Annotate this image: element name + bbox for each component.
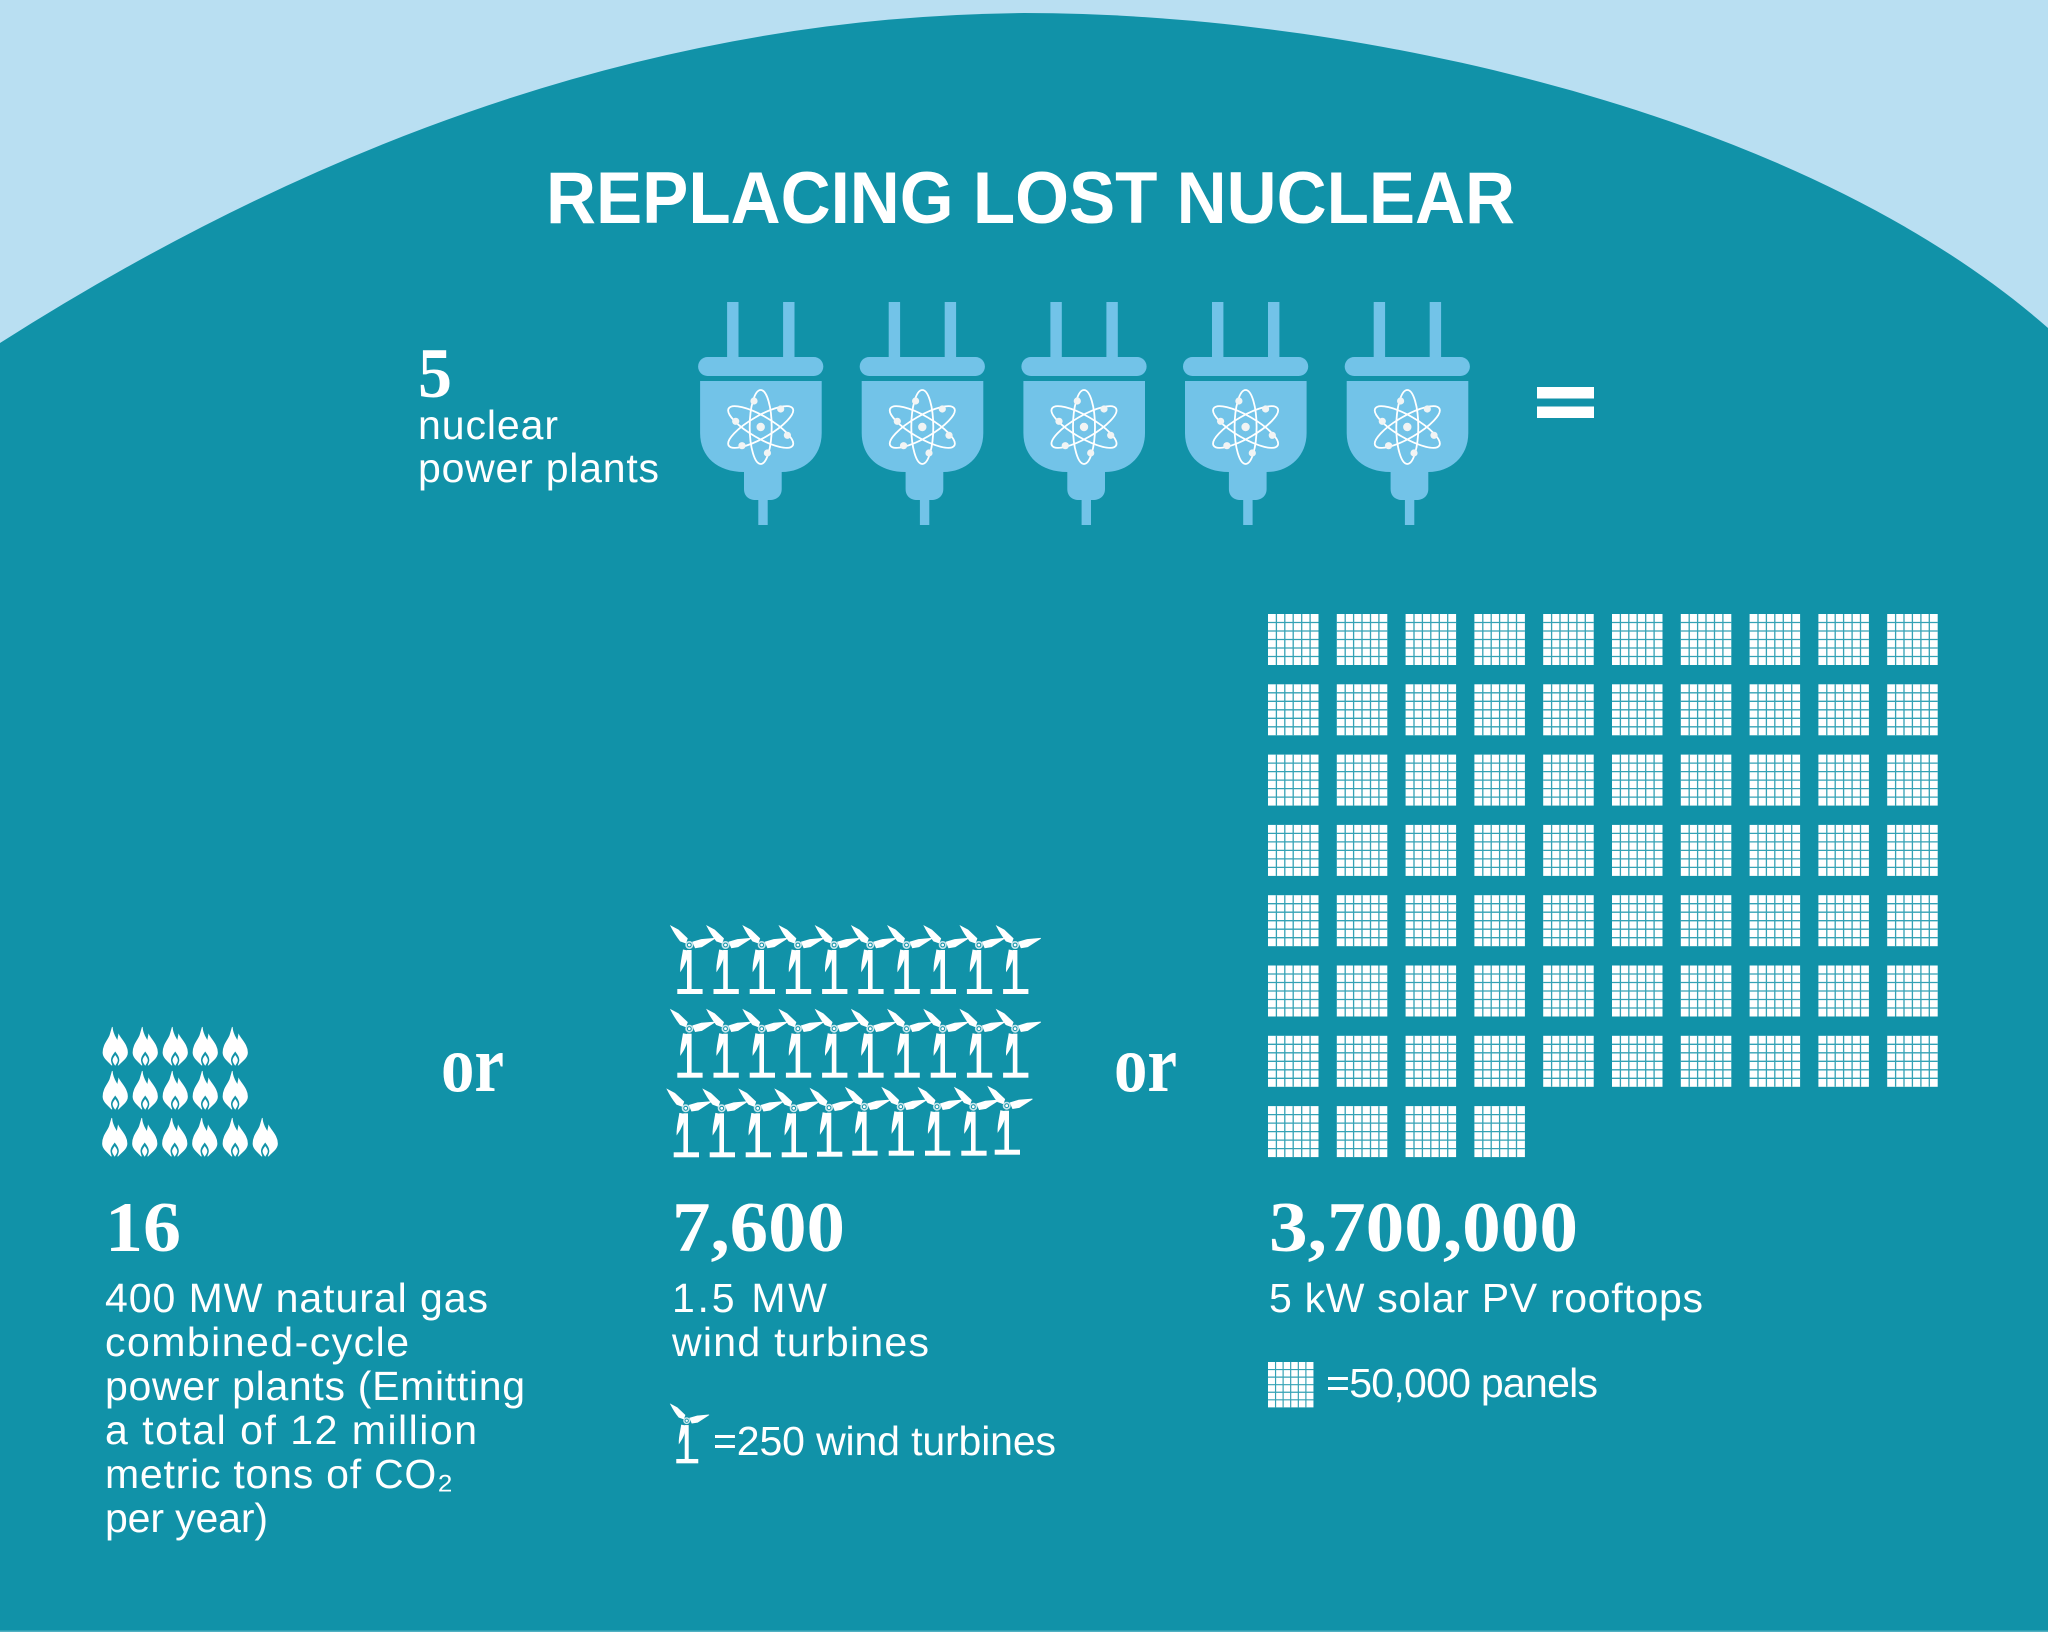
- nuclear count and label: 5: [418, 335, 452, 413]
- gas description: metric tons of CO₂: [105, 1451, 453, 1497]
- wind description: wind turbines: [671, 1319, 929, 1365]
- wind description: [671, 1275, 929, 1365]
- equals sign: [1537, 387, 1594, 418]
- title: REPLACING LOST NUCLEAR: [546, 158, 1515, 239]
- wind figure: 7,600: [672, 1189, 845, 1267]
- wind legend: =250 wind turbines: [713, 1418, 1056, 1464]
- wind description: 1.5 MW: [672, 1275, 827, 1321]
- natural gas section: [102, 1027, 525, 1541]
- gas description: 400 MW natural gas: [105, 1275, 488, 1321]
- nuclear count and label: nuclear: [418, 402, 558, 448]
- solar description: 5 kW solar PV rooftops: [1269, 1275, 1703, 1321]
- or separator one: or: [441, 1021, 504, 1109]
- icons: five nuclear plugs: [698, 302, 1470, 525]
- wind legend: [671, 1404, 1056, 1464]
- gas description: a total of 12 million: [105, 1407, 477, 1453]
- icons: solar panel grid: [1268, 614, 1938, 1157]
- nuclear count and label: power plants: [418, 445, 659, 491]
- gas description: [105, 1275, 525, 1541]
- wind section: [667, 926, 1056, 1464]
- solar legend: =50,000 panels: [1326, 1360, 1598, 1406]
- nuclear section: [418, 302, 1594, 525]
- solar figure: 3,700,000: [1269, 1189, 1578, 1267]
- gas description: per year): [105, 1495, 268, 1541]
- gas description: combined-cycle: [105, 1319, 409, 1365]
- or separator two: or: [1114, 1021, 1177, 1109]
- solar section: [1268, 614, 1938, 1407]
- gas description: power plants (Emitting: [105, 1363, 525, 1409]
- nuclear count and label: [418, 335, 659, 491]
- icons: thirty wind turbines: [667, 926, 1041, 1157]
- icons: sixteen flames: [102, 1027, 278, 1157]
- gas figure: 16: [105, 1189, 181, 1267]
